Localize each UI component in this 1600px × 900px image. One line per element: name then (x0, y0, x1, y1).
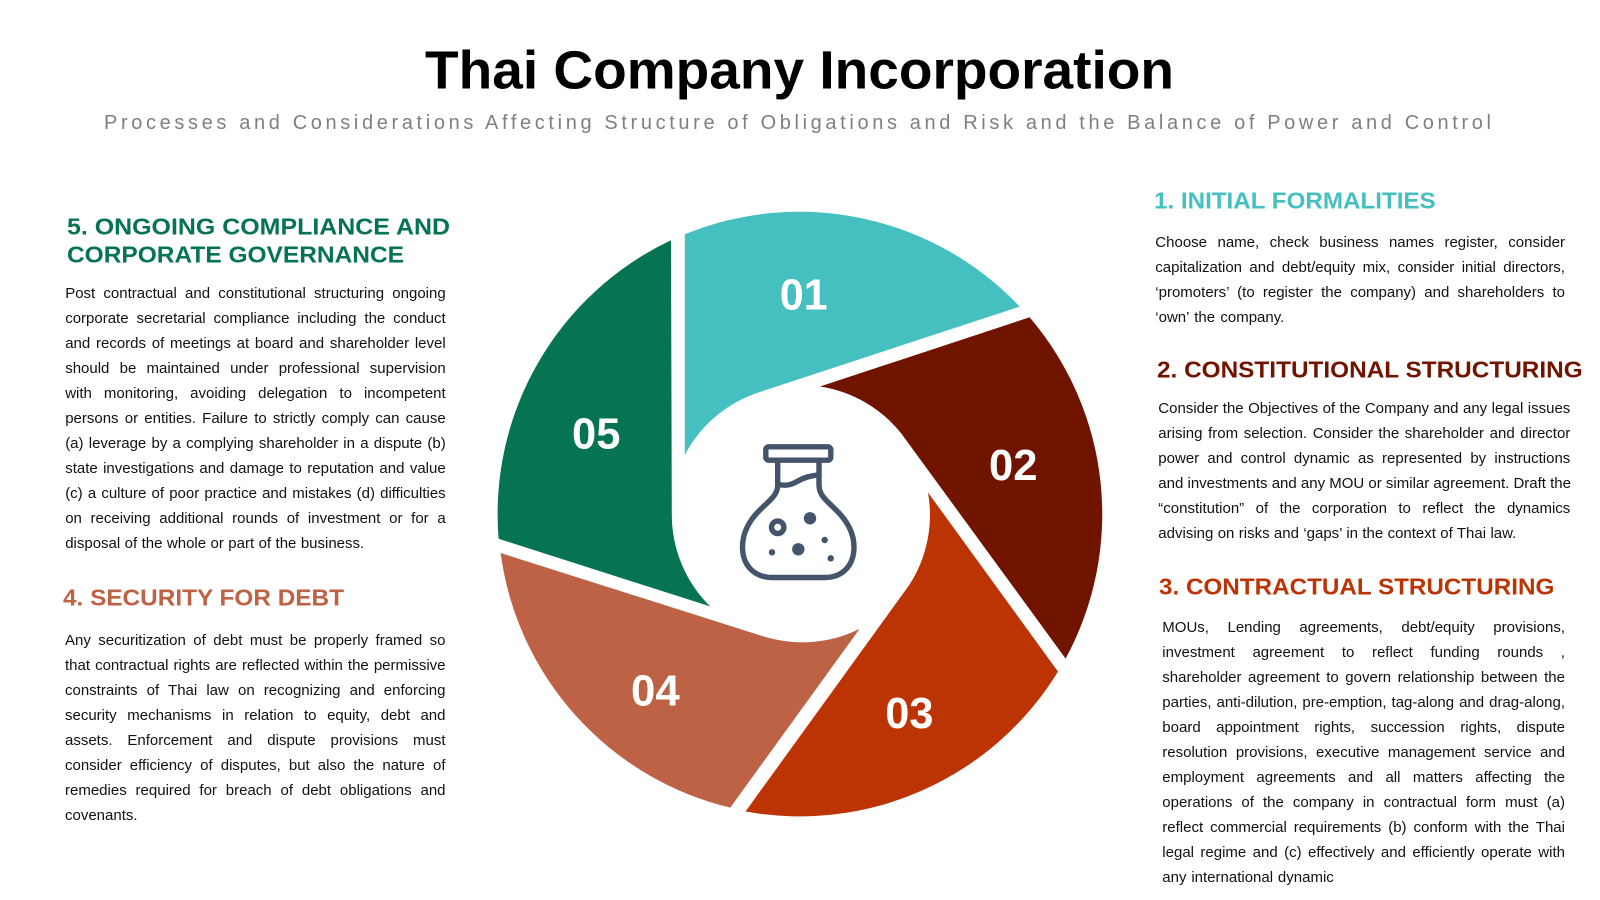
text block: step 3 description: legal regime and (c) effectively and efficiently operate with (1162, 844, 1565, 861)
text block: step 5 description: corporate secretarial compliance including the conduct (65, 310, 446, 327)
text block: step 5 description: (c) a culture of poor practice and mistakes (d) difficulties (65, 485, 446, 502)
segment 02: 02 (989, 441, 1038, 490)
text block: step 4 description: Any securitization of debt must be properly framed so (65, 632, 446, 649)
text block: step 5 description: persons or entities. Failure to strictly comply can cause (65, 410, 446, 427)
panel: 3. contractual structuring (1159, 573, 1565, 886)
segment 03 (746, 492, 1058, 816)
text block: step 2 description: “constitution” of the corporation to reflect the dynamics (1158, 500, 1570, 517)
text block: step 2 description (1158, 400, 1571, 542)
text block: step 4 description: remedies required for breach of debt obligations and (65, 782, 446, 799)
text block: step 4 description: covenants. (65, 807, 138, 824)
text block: step 3 description: shareholder agreement to govern relationship between the (1162, 669, 1565, 686)
text block: step 4 description: that contractual rights are reflected within the permissive (65, 657, 446, 674)
text block: step 3 description: any international dynamic (1162, 869, 1334, 886)
text block: step 3 description: reflect commercial requirements (b) conform with the Thai (1162, 819, 1565, 836)
text block: step 1 description: capitalization and debt/equity mix, consider initial directors, (1155, 259, 1565, 276)
segment 02 (820, 317, 1102, 659)
segment 01: 01 (780, 270, 828, 320)
text block: step 3 description: board appointment rights, succession rights, dispute (1162, 719, 1565, 736)
segment 05: 05 (572, 410, 620, 458)
text block: step 1 description: ‘promoters’ (to register the company) and shareholders to (1155, 284, 1565, 301)
segment 01 (685, 212, 1020, 455)
text block: step 4 description (65, 632, 446, 824)
subtitle: Processes and Considerations Affecting Structure of Obligations and Risk and the Balance of Power and Control (104, 112, 1491, 134)
segment 05 (498, 240, 710, 606)
segment 04: 04 (631, 666, 680, 716)
text block: step 1 description: ‘own’ the company. (1155, 309, 1284, 326)
text block: step 2 description: advising on risks and ‘gaps’ in the context of Thai law. (1158, 525, 1516, 542)
text block: step 3 description: parties, anti-dilution, pre-emption, tag-along and drag-along, (1162, 694, 1565, 711)
text block: step 5 description: (a) leverage by a complying shareholder in a dispute (b) (65, 435, 446, 452)
panel: 4. security for debt (63, 585, 446, 824)
text block: step 2 description: power and control dynamic as represented by instructions (1158, 450, 1570, 467)
text block: step 5 description: disposal of the whole or part of the business. (65, 535, 364, 552)
text block: step 5 description: state investigations and damage to reputation and value (65, 460, 446, 477)
text block: step 5 description (65, 285, 446, 552)
heading: step 5: CORPORATE GOVERNANCE (67, 241, 404, 267)
text block: step 3 description: employment agreements and all matters affecting the (1162, 769, 1565, 786)
text block: step 4 description: security mechanisms in relation to equity, debt and (65, 707, 446, 724)
text block: step 2 description: and investments and any MOU or similar agreement. Draft the (1158, 475, 1571, 492)
heading: step 5 (67, 213, 450, 267)
text block: step 3 description: investment agreement to reflect funding rounds , (1162, 644, 1565, 661)
panel: 2. constitutional structuring (1157, 356, 1583, 542)
segment 03: 03 (885, 689, 934, 738)
chart: five-segment cycle wheel (498, 212, 1102, 816)
text block: step 4 description: consider efficiency of disputes, but also the nature of (65, 757, 446, 774)
heading: step 4: 4. SECURITY FOR DEBT (63, 585, 345, 611)
text block: step 1 description (1155, 234, 1565, 326)
text block: step 4 description: assets. Enforcement and dispute provisions must (65, 732, 446, 749)
panel: 1. initial formalities (1154, 187, 1565, 326)
title: Thai Company Incorporation (425, 41, 1174, 100)
text block: step 2 description: arising from selection. Consider the shareholder and director (1158, 425, 1570, 442)
text block: step 3 description (1162, 619, 1565, 886)
text block: step 4 description: constraints of Thai law on recognizing and enforcing (65, 682, 446, 699)
segment 04 (501, 553, 860, 808)
panel: 5. ongoing compliance and corporate governance (65, 213, 450, 552)
text block: step 3 description: resolution provisions, executive management service and (1162, 744, 1565, 761)
text block: step 1 description: Choose name, check business names register, consider (1155, 234, 1565, 251)
heading: step 5: 5. ONGOING COMPLIANCE AND (67, 213, 450, 239)
text block: step 5 description: and records of meetings at board and shareholder level (65, 335, 446, 352)
heading: step 3: 3. CONTRACTUAL STRUCTURING (1159, 573, 1554, 599)
text block: step 2 description: Consider the Objectives of the Company and any legal issues (1158, 400, 1570, 417)
text block: step 5 description: Post contractual and constitutional structuring ongoing (65, 285, 446, 302)
text block: step 3 description: MOUs, Lending agreements, debt/equity provisions, (1162, 619, 1565, 636)
icon: laboratory flask (742, 447, 854, 578)
text block: step 3 description: operations of the company in contractual form must (a) (1162, 794, 1565, 811)
heading: step 2: 2. CONSTITUTIONAL STRUCTURING (1157, 356, 1583, 382)
heading: step 1: 1. INITIAL FORMALITIES (1154, 187, 1436, 213)
text block: step 5 description: should be maintained under professional supervision (65, 360, 446, 377)
text block: step 5 description: with monitoring, avoiding delegation to incompetent (65, 385, 446, 402)
text block: step 5 description: on receiving additional rounds of investment or for a (65, 510, 446, 527)
